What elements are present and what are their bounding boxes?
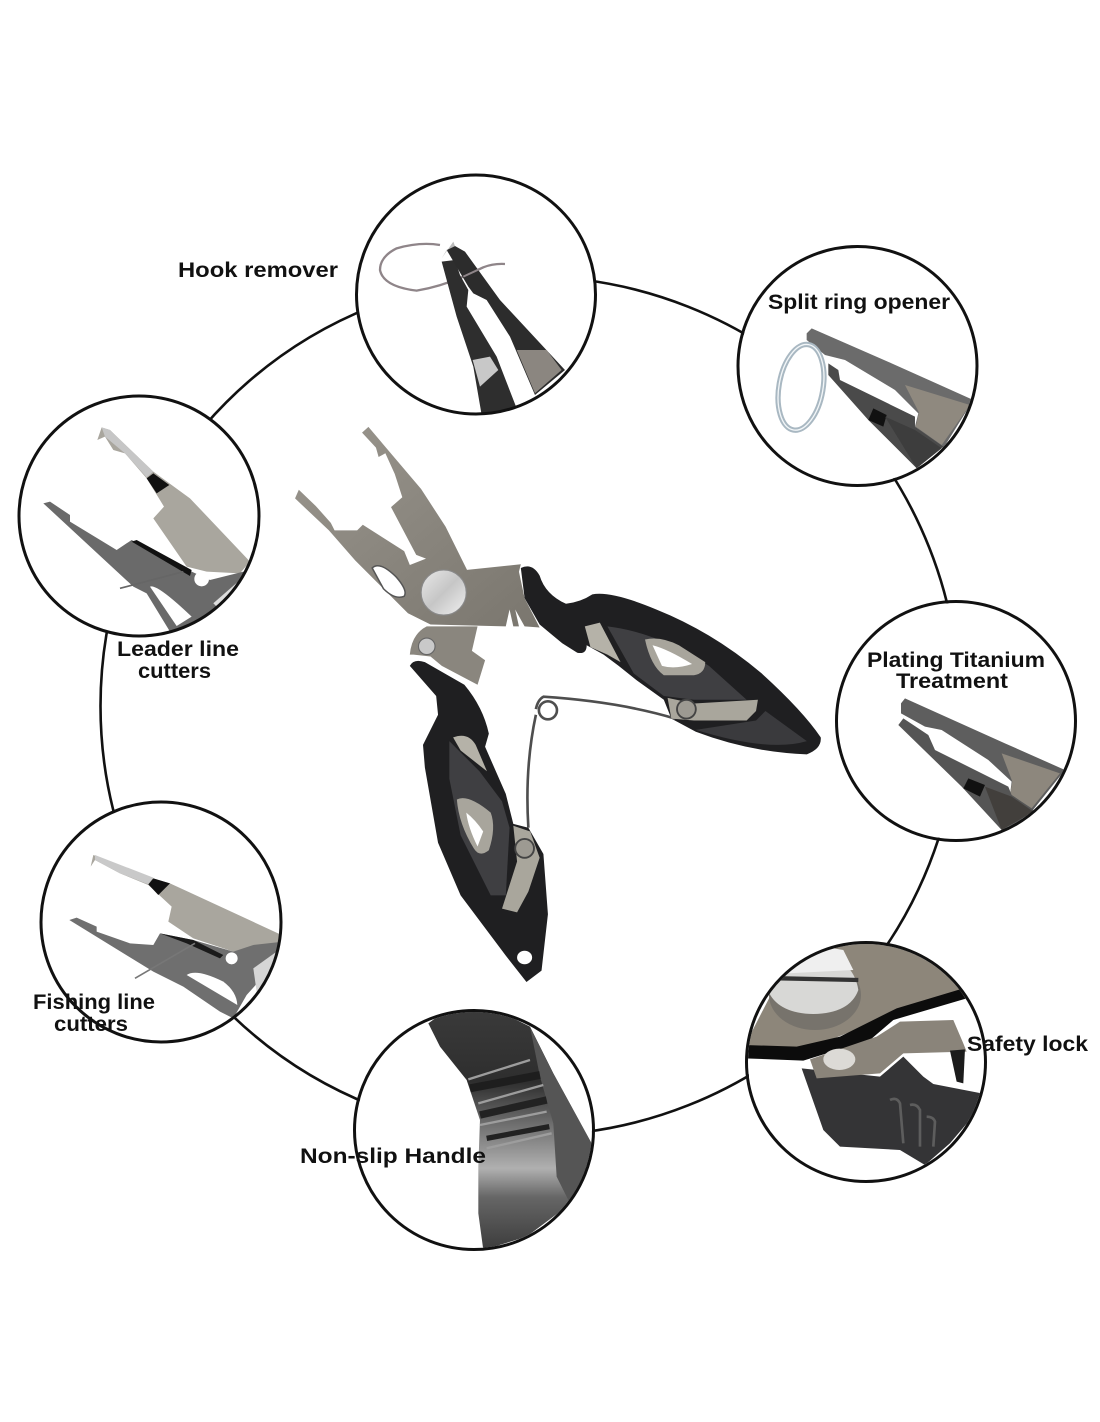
panel: split ring opener [744, 328, 971, 478]
safety lock ring [746, 942, 986, 1182]
upper handle tip panel [696, 711, 807, 745]
coated plier tip [898, 698, 1065, 830]
hook and plier tips [380, 242, 565, 415]
panel: safety lock [748, 944, 980, 1164]
panel: fishing line cutters [70, 812, 279, 1018]
handle grip close-up [428, 1010, 592, 1250]
label: plating titanium treatment [867, 649, 1045, 693]
upper window opening [653, 645, 692, 667]
label: plating titanium treatment: Plating Titanium [867, 649, 1045, 672]
upper handle panel [607, 626, 747, 700]
hook remover ring [356, 175, 596, 414]
lock close-up [745, 940, 982, 1165]
label: fishing line cutters [33, 991, 155, 1036]
steel jaws and body [295, 427, 540, 628]
label: fishing line cutters: cutters [54, 1013, 128, 1036]
label: leader line cutters: Leader line [117, 638, 239, 661]
plier tip and split ring [772, 328, 973, 468]
label: leader line cutters: cutters [138, 660, 211, 683]
lower spring plate [502, 826, 540, 912]
spring plate [668, 698, 758, 720]
jaw hole [372, 566, 405, 597]
lower window opening [466, 813, 483, 847]
safety lock tab [410, 626, 485, 685]
label: safety lock: Safety lock [967, 1033, 1088, 1056]
lower handle [410, 661, 548, 982]
label: plating titanium treatment: Treatment [896, 670, 1008, 693]
label: fishing line cutters: Fishing line [33, 991, 155, 1014]
non-slip handle ring [354, 1010, 594, 1250]
spring wire [527, 697, 675, 828]
upper handle [521, 566, 821, 754]
leader line cutters ring [19, 396, 259, 636]
panel: non-slip handle [356, 1010, 592, 1250]
lock rivet [418, 638, 435, 655]
split ring opener ring [738, 246, 977, 486]
label: leader line cutters [117, 638, 239, 683]
plating titanium ring [836, 602, 1076, 840]
panel: plating titanium treatment [898, 603, 1064, 838]
cutter close-up with line [69, 855, 283, 1018]
panel: leader line cutters [43, 420, 249, 630]
large connecting ring [100, 276, 960, 1136]
label: hook remover: Hook remover [178, 259, 338, 282]
lanyard hole [517, 951, 532, 964]
lower handle insert [453, 736, 487, 771]
upper handle insert [585, 623, 621, 662]
lower handle window [457, 798, 493, 854]
lower handle panel [449, 741, 510, 895]
upper handle window [645, 638, 705, 675]
fishing line cutters ring [41, 802, 281, 1042]
main pliers illustration [295, 427, 821, 982]
label: non-slip handle: Non-slip Handle [300, 1145, 486, 1168]
pivot screw [421, 570, 466, 615]
label: split ring opener: Split ring opener [768, 291, 950, 314]
spring rivet upper [677, 700, 696, 719]
spring rivet lower [515, 839, 534, 858]
panel: hook remover [359, 242, 594, 412]
cutter close-up with leader line [43, 427, 250, 632]
